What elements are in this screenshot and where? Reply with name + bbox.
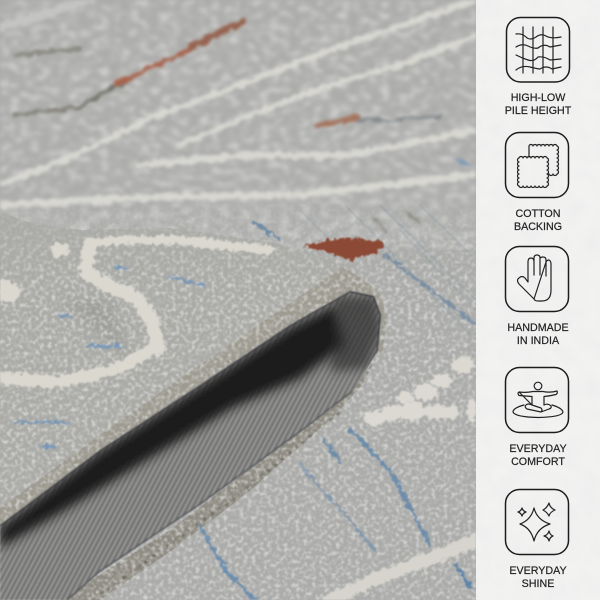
cream pile blobs <box>363 356 477 425</box>
rug photograph <box>0 0 477 600</box>
feature: high-low pile height <box>505 18 572 117</box>
pile grain <box>6 268 381 600</box>
label: BACKING <box>514 221 562 233</box>
rolled fold lip <box>60 362 374 600</box>
label: EVERYDAY <box>509 443 567 455</box>
icon: meditating person <box>506 368 568 432</box>
label: HIGH-LOW <box>511 92 566 104</box>
label: PILE HEIGHT <box>505 105 572 117</box>
feature: cotton backing <box>506 132 568 233</box>
label: COTTON <box>516 208 560 220</box>
label: EVERYDAY <box>509 565 567 577</box>
rug backing underside <box>0 280 400 600</box>
label: HANDMADE <box>507 322 569 334</box>
label: COMFORT <box>511 456 565 468</box>
front face cream pile pattern <box>0 224 270 447</box>
panel: feature sidebar <box>476 0 600 600</box>
label: SHINE <box>522 578 554 590</box>
rust motif behind fold <box>302 237 384 260</box>
background rug lower motifs <box>200 205 477 600</box>
feature: everyday comfort <box>506 368 568 468</box>
icon: woven pile <box>506 18 570 82</box>
icon: hand <box>506 246 568 312</box>
icon: fabric swatches <box>506 132 568 198</box>
icon: sparkles <box>506 490 568 554</box>
background rug upper motifs <box>0 0 476 232</box>
rolled rug front face <box>0 205 400 535</box>
feature: handmade in India <box>506 246 569 347</box>
label: IN INDIA <box>517 335 560 347</box>
feature: everyday shine <box>506 490 568 590</box>
